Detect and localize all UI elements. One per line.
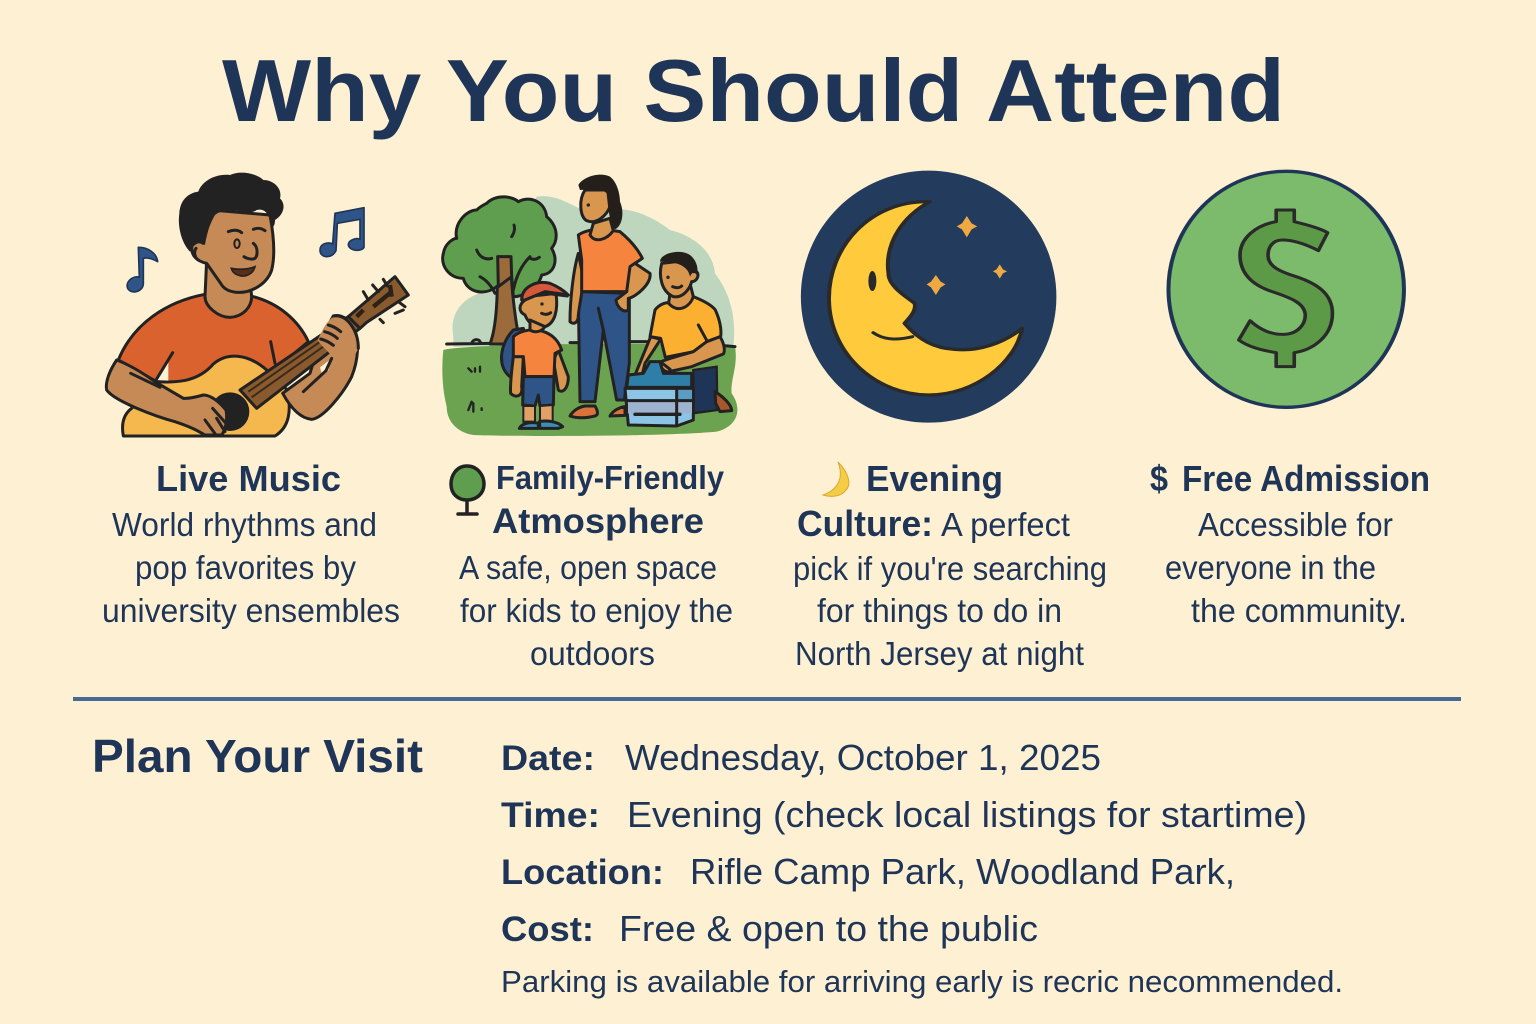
panel: free admission [1150, 458, 1430, 629]
text: free admission description: Accessible for [1198, 506, 1393, 543]
text: family-friendly description [459, 549, 733, 672]
panel: family-friendly atmosphere [451, 459, 733, 672]
title: Why You Should Attend [222, 41, 1285, 140]
icon: small crescent [823, 462, 849, 496]
sky backdrop [453, 196, 734, 347]
heading: free admission: $ [1150, 458, 1168, 499]
woman [570, 175, 650, 418]
cost row: Free & open to the public [619, 908, 1038, 949]
text: live music description: World rhythms and [112, 506, 377, 543]
heading: family-friendly atmosphere [492, 459, 725, 541]
text: evening culture description [793, 506, 1107, 672]
heading: evening culture: Evening [866, 458, 1003, 499]
icon: musician playing guitar [106, 173, 408, 436]
text: live music description: pop favorites by [135, 549, 356, 586]
cooler [625, 362, 693, 426]
heading: evening culture [797, 458, 1003, 544]
neck [205, 260, 252, 317]
music notes [127, 208, 364, 292]
moon face [868, 271, 876, 291]
text: free admission description: the community. [1191, 592, 1407, 629]
fretting arm [283, 316, 358, 419]
parking note: Parking is available for arriving early is recric necommended. [501, 964, 1343, 999]
guitar neck and sound hole [211, 392, 249, 431]
night sky circle [801, 171, 1056, 423]
heading: family-friendly atmosphere: Atmosphere [492, 502, 704, 541]
dollar sign [1239, 210, 1332, 367]
head [192, 210, 274, 292]
guitar body [123, 356, 289, 436]
man kneeling with cooler [635, 252, 732, 413]
text: evening culture description: North Jersey at night [795, 635, 1084, 672]
icon: crescent moon with stars [801, 171, 1056, 423]
time row: Time: [501, 796, 600, 835]
hair [179, 173, 284, 252]
time row: Evening (check local listings for startime) [627, 794, 1307, 835]
text: evening culture description: pick if you're searching [793, 550, 1107, 587]
heading: plan your visit: Plan Your Visit [92, 730, 423, 782]
crescent moon [829, 202, 1022, 395]
text: family-friendly description: for kids to enjoy the [460, 592, 733, 629]
shirt [118, 294, 308, 390]
heading: evening culture: Culture: [797, 503, 933, 544]
icon: small tree [451, 466, 484, 514]
icon: family at the park [442, 175, 737, 436]
icon: dollar coin [1168, 171, 1404, 407]
green circle [1168, 171, 1404, 407]
text: family-friendly description: A safe, open space [459, 549, 717, 586]
date row: Date: [501, 739, 595, 778]
grass [442, 344, 737, 436]
boy with cap [502, 282, 568, 428]
cost row: Cost: [501, 910, 594, 949]
panel: evening culture [793, 458, 1107, 672]
text: evening culture description: for things to do in [817, 592, 1062, 629]
text: evening culture description: A perfect [941, 506, 1070, 543]
text: family-friendly description: outdoors [530, 635, 655, 672]
location row: Rifle Camp Park, Woodland Park, [690, 851, 1235, 892]
date row: Wednesday, October 1, 2025 [625, 737, 1101, 778]
tree [490, 257, 520, 344]
heading: live music: Live Music [156, 458, 341, 499]
panel: visit details [501, 737, 1343, 999]
strumming arm [106, 360, 227, 435]
location row: Location: [501, 853, 664, 892]
stars [927, 216, 1007, 295]
fretting hand [318, 315, 358, 360]
heading: family-friendly atmosphere: Family-Friendly [496, 459, 725, 496]
face [195, 228, 265, 260]
heading: free admission: Free Admission [1182, 458, 1430, 499]
text: live music description [102, 506, 400, 629]
panel: live music [102, 458, 400, 629]
text: free admission description [1165, 506, 1407, 629]
text: free admission description: everyone in the [1165, 549, 1376, 586]
text: live music description: university ensembles [102, 592, 400, 629]
